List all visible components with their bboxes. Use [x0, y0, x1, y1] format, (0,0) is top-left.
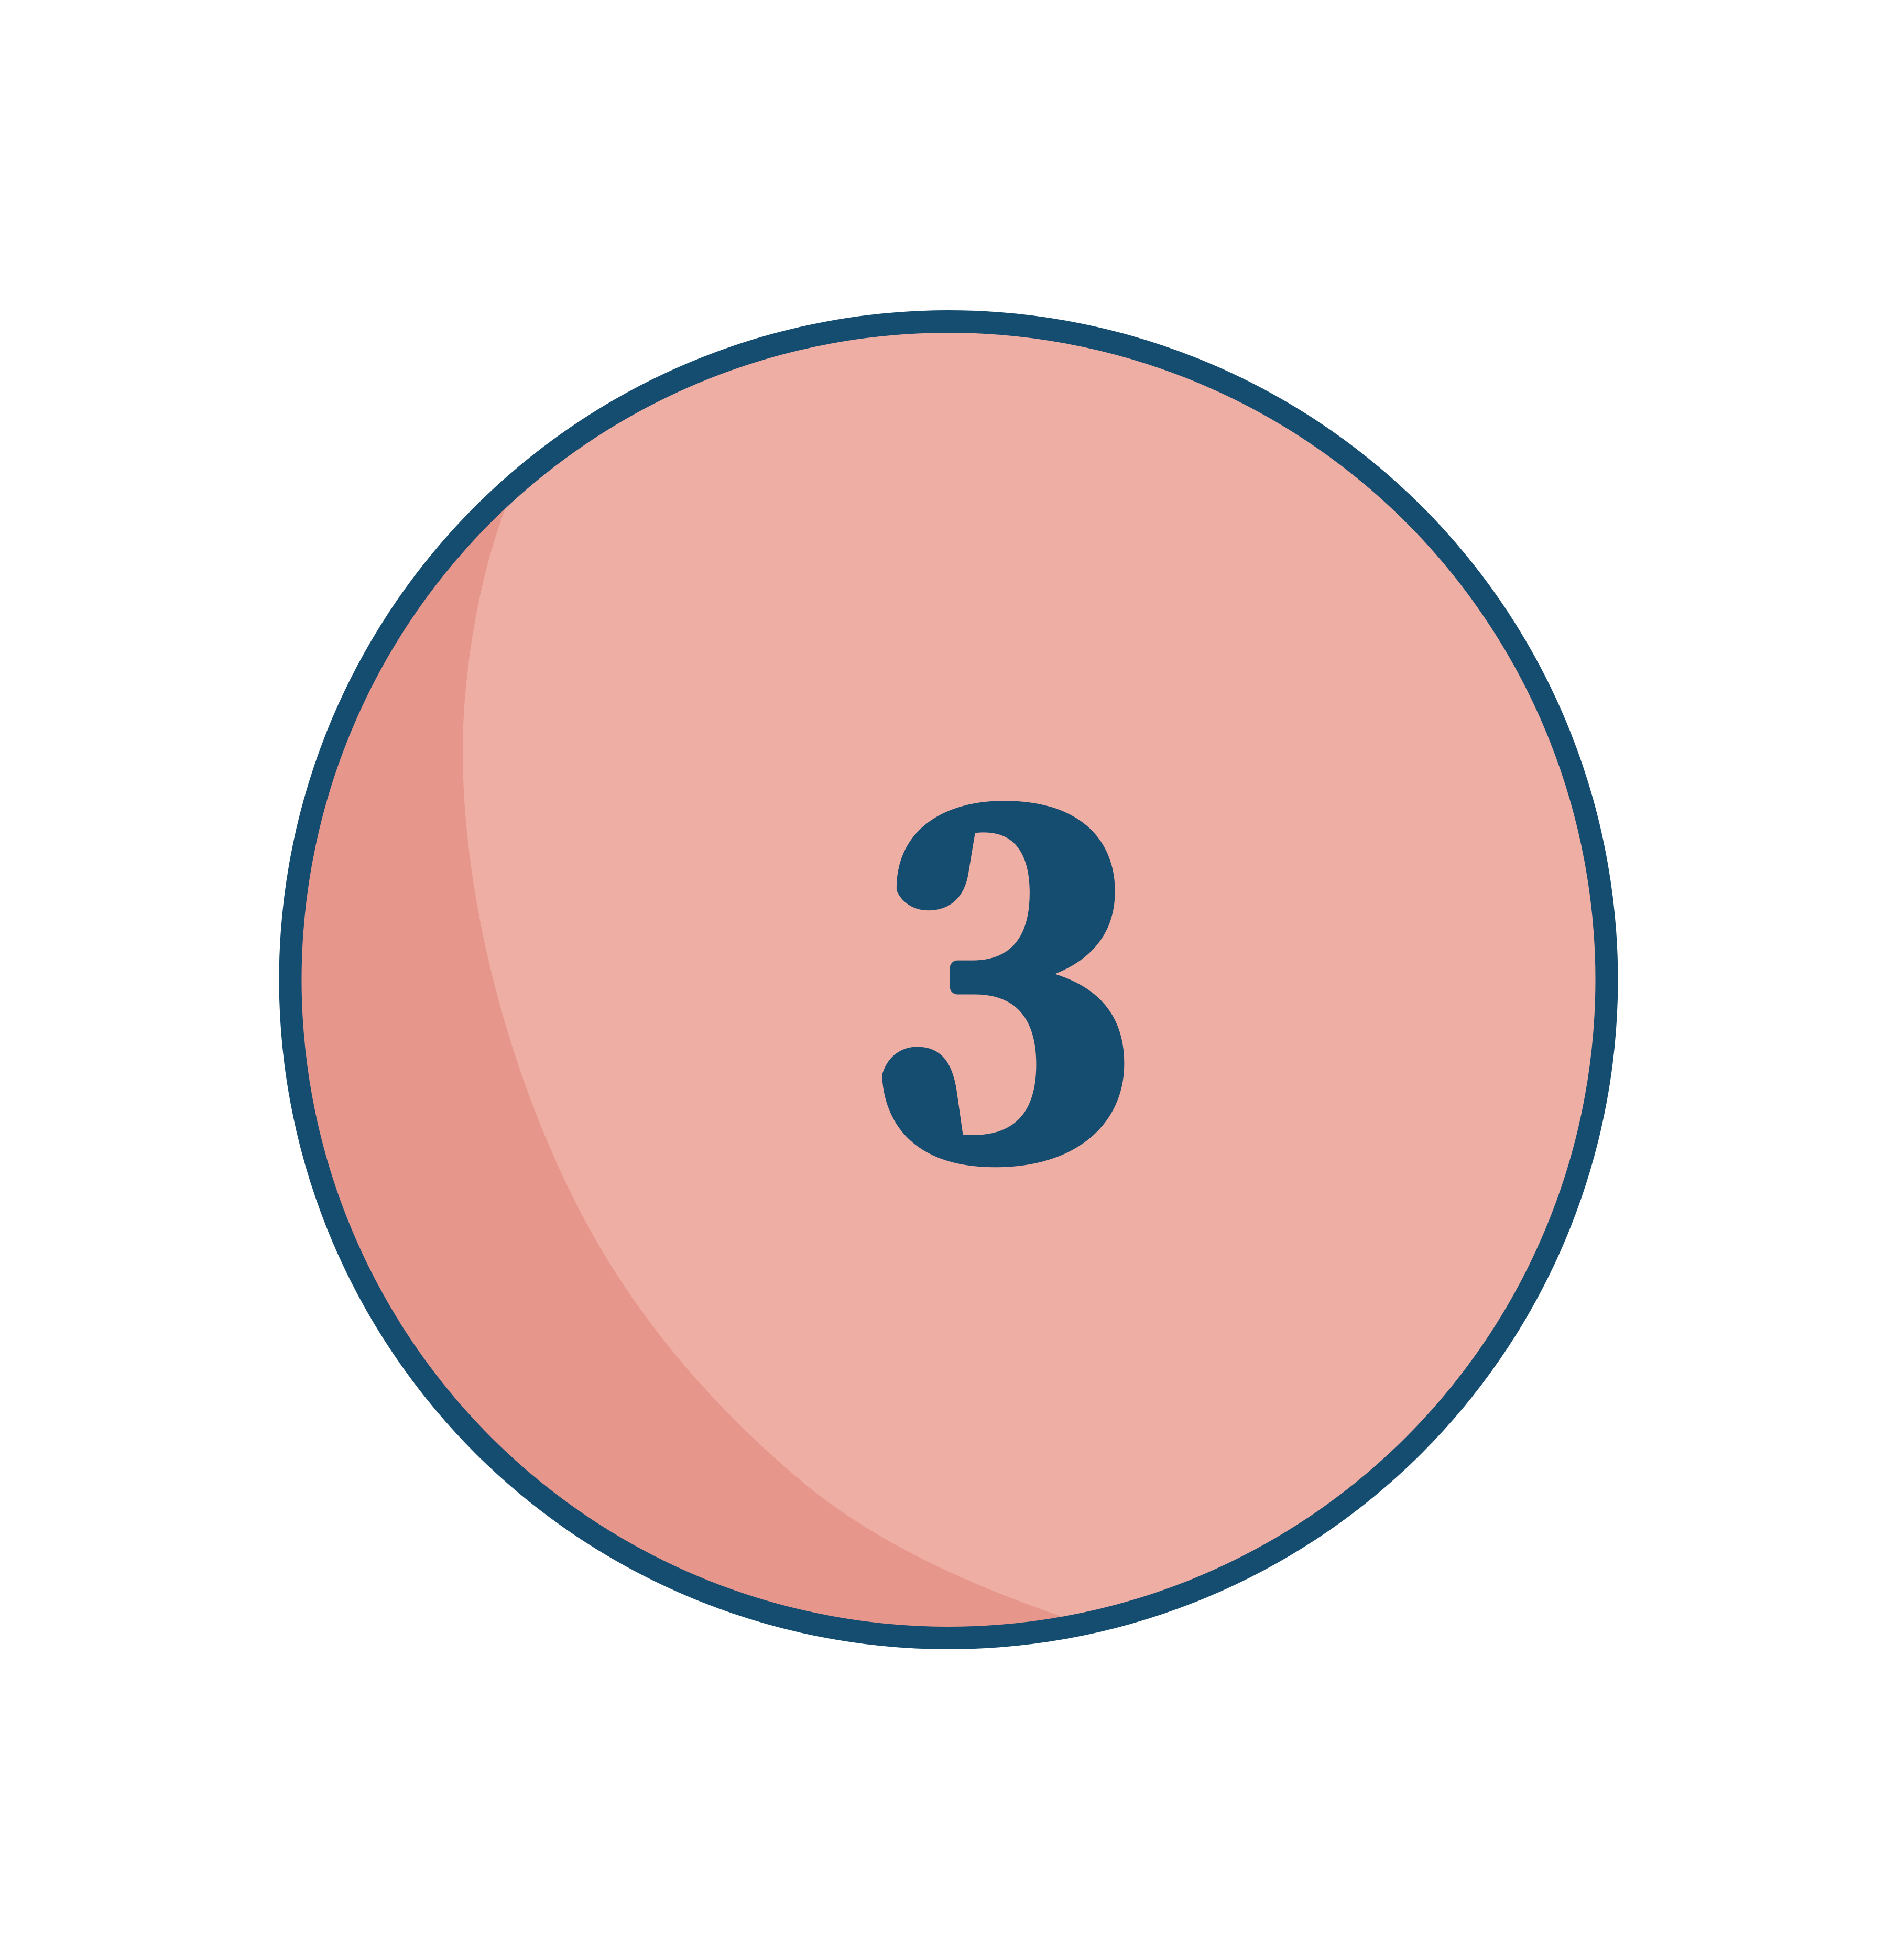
circle fill: [290, 322, 1607, 1638]
number 3: 3: [868, 614, 1137, 1285]
circle outline: [290, 322, 1607, 1638]
crescent shadow: [302, 508, 1062, 1627]
